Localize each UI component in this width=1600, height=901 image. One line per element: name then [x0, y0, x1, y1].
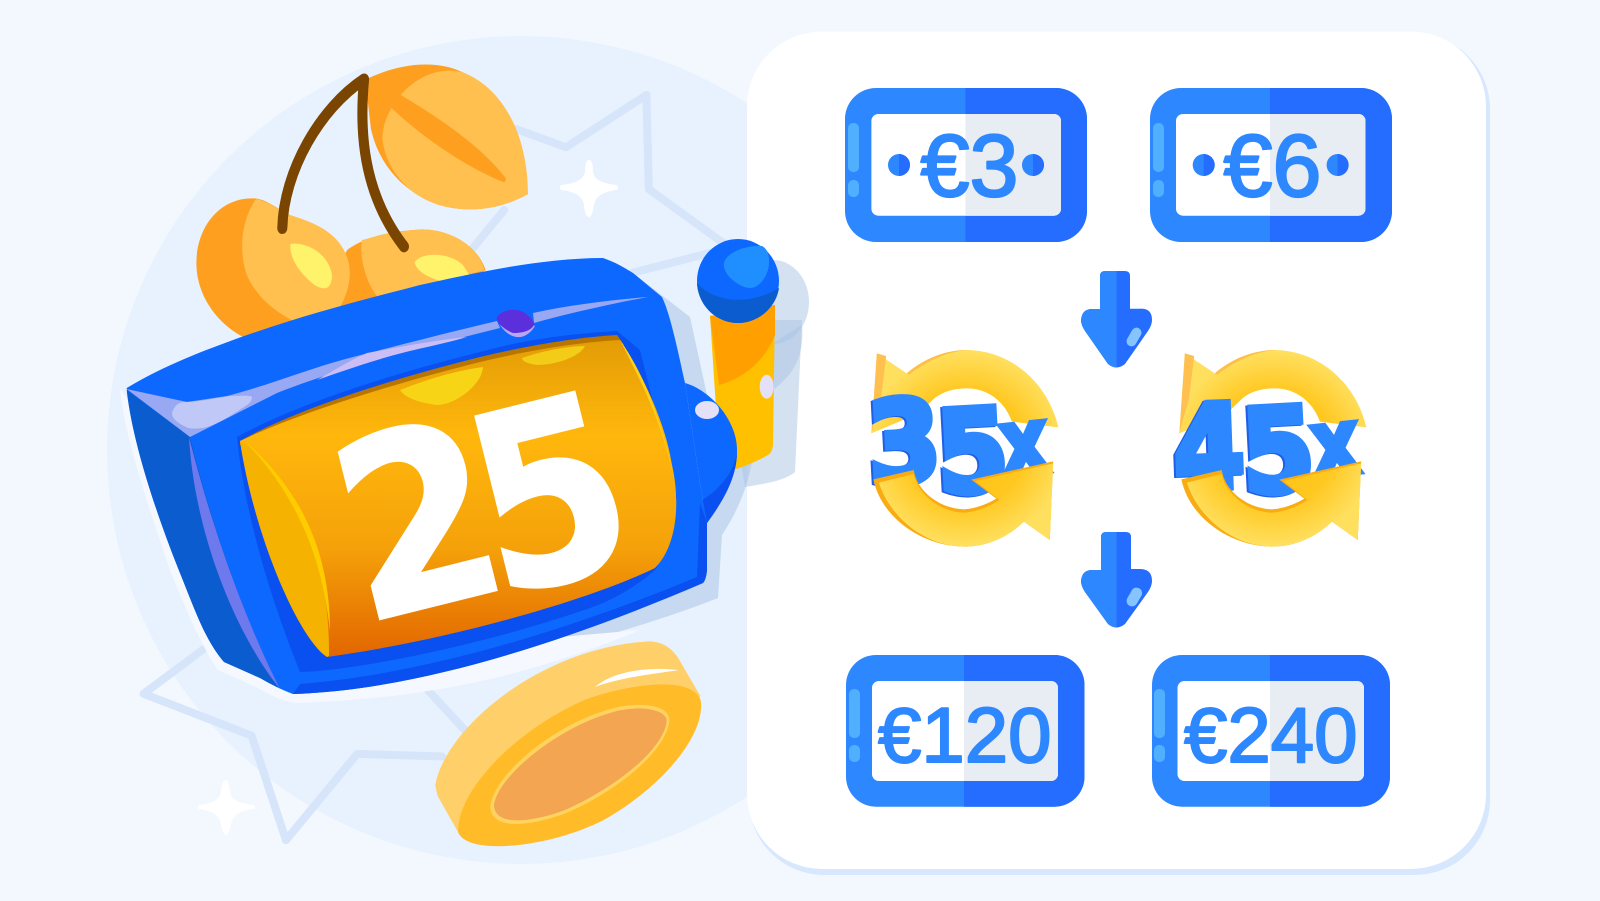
multiplier text: 5 [1238, 383, 1318, 521]
lever [697, 239, 779, 470]
wagering icon: 35x [862, 350, 1058, 547]
side button pill [695, 401, 719, 419]
loop arrow upper [1179, 350, 1366, 433]
icon: sparkle bottom [198, 780, 255, 835]
purple button [497, 310, 535, 337]
reel left cap stripe [247, 443, 330, 631]
background star outline [144, 95, 725, 840]
cabinet outer dark edge [293, 503, 707, 694]
multiplier text: 4 [1169, 380, 1245, 518]
banknote: €120 [846, 655, 1084, 807]
multiplier text: 5 [1236, 384, 1316, 522]
loop arrow upper [871, 350, 1058, 433]
reel [240, 340, 676, 657]
background circle [107, 36, 935, 864]
banknote: €6 [1150, 88, 1392, 242]
left cherry [196, 198, 350, 341]
illustration: slot machine with cherries and coin [120, 65, 809, 846]
multiplier text: 5 [933, 383, 1012, 520]
panel shadow [749, 34, 1490, 875]
bulge lower shade [702, 452, 737, 523]
banknote: €3 [845, 88, 1087, 242]
icon: sparkle top [560, 160, 618, 217]
reel number 25 [308, 338, 658, 680]
multiplier text: x [1305, 387, 1365, 499]
machine halo [120, 388, 640, 703]
lavender highlight [317, 337, 467, 380]
banknote: €120: €120 [878, 691, 1052, 779]
right cherry [339, 229, 486, 307]
multiplier text [1169, 379, 1365, 522]
multiplier text: 3 [864, 374, 944, 511]
reel highlight small [522, 346, 585, 365]
cabinet [127, 258, 707, 694]
machine body [127, 258, 737, 694]
cherries and leaf [196, 65, 528, 341]
lever knob [697, 239, 779, 323]
banknote: €6: €6 [1224, 116, 1321, 215]
multiplier text: 5 [931, 384, 1010, 521]
reel number 25: 2 [308, 364, 529, 680]
multiplier text: 3 [862, 375, 942, 512]
panel surface [747, 32, 1486, 869]
reel left cap [240, 441, 329, 657]
coin [435, 641, 701, 846]
multiplier text [862, 374, 1054, 521]
leaf [366, 65, 528, 209]
top light stripe [127, 321, 500, 437]
lever stem [710, 305, 775, 470]
loop arrow lower [1181, 461, 1361, 547]
reel number 25: 5 [442, 338, 658, 654]
corner highlight [172, 396, 252, 429]
reel top edge [240, 335, 624, 445]
machine shadow [440, 273, 753, 677]
lever shadow [730, 260, 809, 487]
top stripe right part [533, 297, 648, 323]
cabinet left side [127, 390, 279, 688]
panel: wagering flow [747, 32, 1490, 875]
multiplier text: 4 [1171, 379, 1247, 517]
arrow: down bottom [1081, 532, 1152, 628]
side stripe [189, 437, 280, 689]
multiplier text: x [994, 386, 1054, 498]
wagering icon: 45x [1169, 350, 1366, 547]
banknote: €240 [1152, 655, 1390, 807]
reel inner dark frame [237, 331, 677, 672]
arrow: down top [1081, 271, 1152, 368]
reel right stripe [620, 340, 674, 480]
reel highlight large [400, 367, 483, 405]
banknote: €240: €240 [1184, 691, 1358, 779]
banknote: €3: €3 [920, 116, 1018, 215]
cherry stems [282, 79, 404, 247]
loop arrow lower [873, 461, 1053, 547]
side button bulge [685, 383, 737, 523]
